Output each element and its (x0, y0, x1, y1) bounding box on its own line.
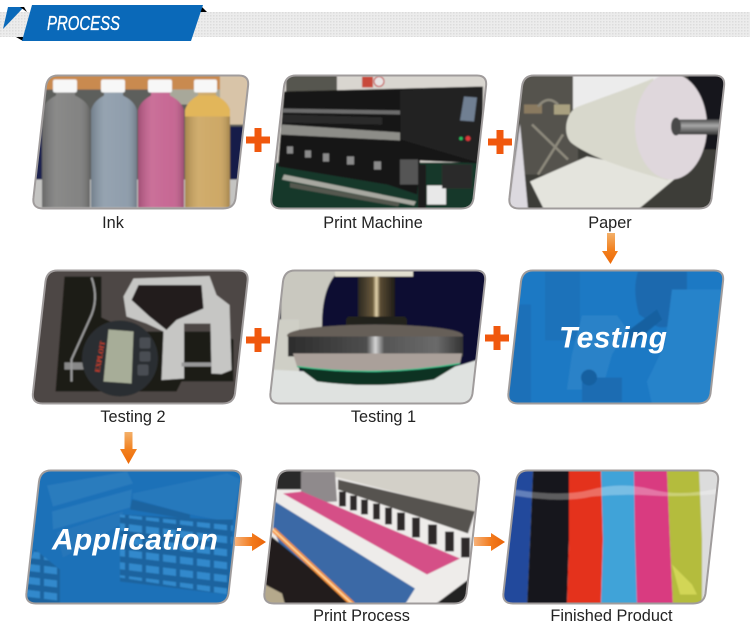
plus icon 2 (488, 130, 512, 154)
scientist (635, 272, 687, 327)
press shaft (358, 276, 395, 324)
bottle: black ink (42, 80, 90, 208)
panel: testing (507, 270, 727, 404)
white marks (287, 146, 381, 170)
nozzle row (339, 492, 470, 558)
panel: paper roll (508, 74, 728, 210)
junction boxes (524, 104, 542, 114)
roll end (635, 74, 707, 180)
header fold corners (16, 5, 207, 41)
panel: application (25, 470, 245, 604)
arrow: application to print process (235, 533, 266, 551)
panel: print process (263, 470, 483, 604)
header blue ribbon (22, 5, 203, 41)
arrow: paper to testing (602, 233, 618, 264)
black base (266, 536, 348, 602)
control panel (460, 96, 477, 122)
caliper frame (124, 276, 232, 380)
label: print machine: Print Machine (323, 214, 423, 232)
header title: PROCESS (47, 13, 120, 35)
machine body (278, 86, 483, 194)
application title: Application (51, 524, 218, 556)
table (271, 359, 476, 402)
print head (301, 472, 337, 502)
gauge screen (104, 330, 134, 384)
panel: thickness gauge (32, 270, 252, 404)
machine corner (435, 574, 475, 604)
bottle: cyan ink (91, 80, 137, 208)
stacked cartons right (120, 514, 233, 594)
header band (0, 5, 750, 41)
ribbon stripes (500, 470, 702, 604)
bottle: magenta ink (138, 80, 184, 208)
left white strip (508, 124, 528, 210)
arrow: testing 2 to application (120, 432, 137, 464)
press disc (286, 324, 464, 338)
panel: press test (269, 270, 489, 404)
orange strip (273, 530, 353, 604)
plus icon 1 (246, 128, 270, 152)
testing title: Testing (559, 322, 667, 354)
label: paper: Paper (588, 214, 632, 232)
blue cloth (273, 502, 415, 604)
panel: print machine (270, 74, 490, 210)
foam cutout (56, 276, 234, 392)
satin highlight (514, 486, 722, 500)
axle (674, 120, 720, 134)
label: ink: Ink (102, 214, 125, 232)
gauge brand: EXPLOIT (94, 340, 107, 373)
label: testing 2: Testing 2 (100, 408, 166, 426)
roll body (565, 78, 660, 178)
header accent triangle (3, 7, 24, 29)
panel: ink bottles (32, 74, 252, 210)
stacked cartons left (47, 472, 133, 506)
panel: finished product (500, 470, 722, 604)
plus icon 4 (485, 326, 509, 350)
paper sheet (530, 156, 680, 210)
label: print process: Print Process (313, 607, 410, 625)
label: finished product: Finished Product (550, 607, 673, 625)
gauge buttons (138, 338, 150, 376)
plus icon 3 (246, 328, 270, 352)
microscope (567, 316, 627, 390)
lower rails (282, 174, 416, 206)
dial gauge (82, 320, 158, 396)
bottle: yellow ink (185, 80, 230, 208)
magenta print (283, 492, 460, 574)
label: testing 1: Testing 1 (351, 408, 416, 426)
arrow: print process to finished product (474, 533, 505, 551)
